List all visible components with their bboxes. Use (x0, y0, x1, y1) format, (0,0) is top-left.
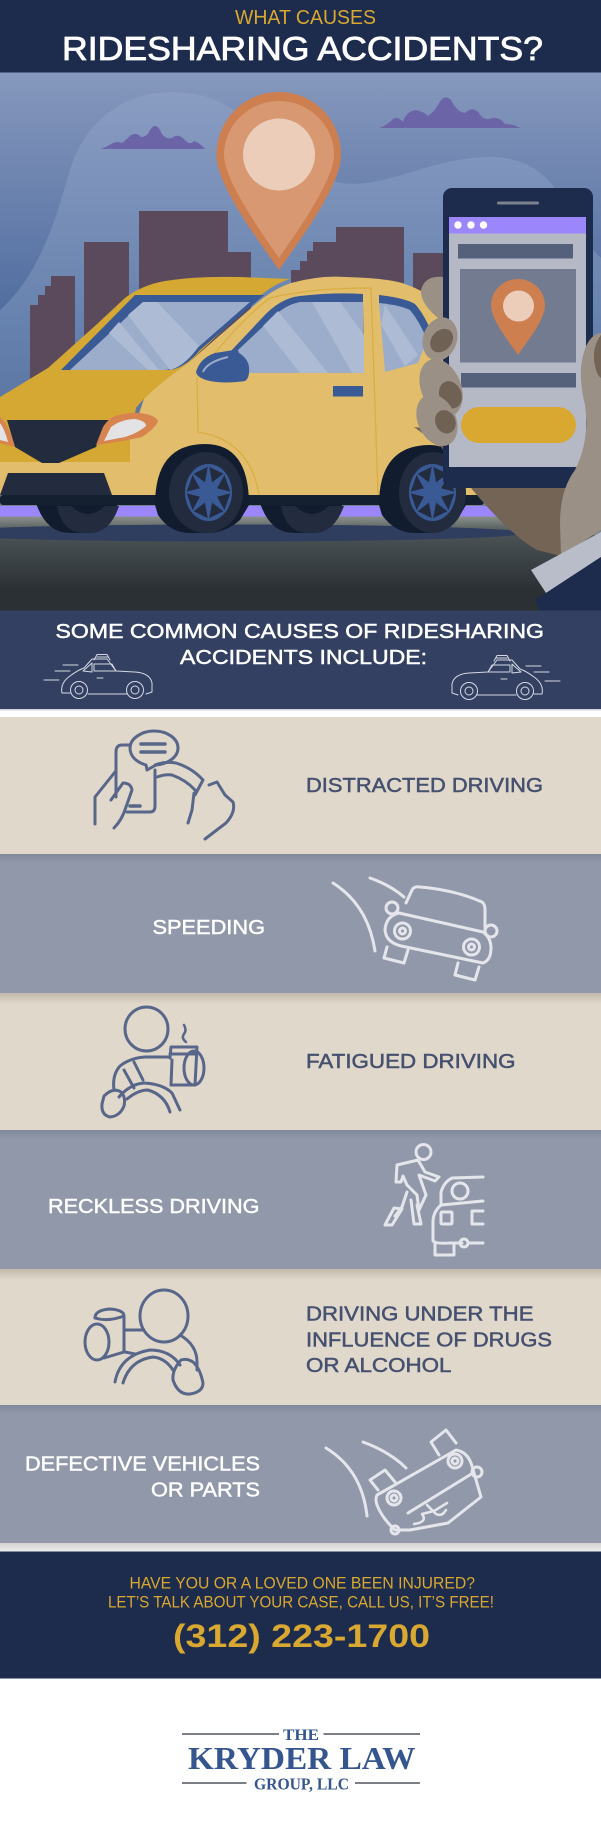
phone screen (449, 217, 586, 467)
label: driving under the influence: DRIVING UNDER THE (306, 1304, 534, 1326)
label: fatigued driving: FATIGUED DRIVING (306, 1051, 516, 1073)
title banner (0, 0, 601, 72)
far wheels (35, 500, 344, 533)
heading line 1: SOME COMMON CAUSES OF RIDESHARING (56, 620, 544, 643)
phone number: (312) 223-1700 (173, 1618, 430, 1654)
label: driving under the influence (306, 1304, 552, 1377)
front wheel (155, 444, 249, 533)
side window rear (379, 295, 435, 372)
label: defective vehicles (25, 1454, 260, 1502)
fingers and arm (408, 277, 601, 556)
cta line 1: HAVE YOU OR A LOVED ONE BEEN INJURED? (130, 1575, 475, 1593)
icon: overturned car (326, 1430, 482, 1534)
icon: driver with drink (85, 1290, 203, 1394)
logo (182, 1727, 420, 1794)
heading line 2: ACCIDENTS INCLUDE: (180, 646, 427, 669)
logo: the: THE (283, 1727, 319, 1744)
panel: reckless driving (0, 1130, 601, 1269)
call to action button (461, 407, 576, 443)
logo: kryder law: KRYDER LAW (188, 1740, 416, 1776)
label: driving under the influence: INFLUENCE OF DRUGS (306, 1330, 552, 1352)
panel: fatigued driving (0, 993, 601, 1130)
title: what causes: WHAT CAUSES (235, 6, 376, 29)
label: reckless driving: RECKLESS DRIVING (48, 1196, 260, 1218)
cloud right (379, 97, 520, 128)
windshield (61, 295, 264, 370)
location pin (216, 92, 341, 270)
icon: speeding car (333, 878, 497, 980)
icon: taxi right (452, 656, 560, 700)
cloud left (101, 126, 205, 149)
side window front (230, 293, 364, 373)
cta line 2: LET’S TALK ABOUT YOUR CASE, CALL US, IT’S FREE! (108, 1594, 494, 1612)
hero illustration (0, 72, 601, 610)
panel: speeding (0, 854, 601, 993)
headlight left (0, 417, 15, 447)
label: driving under the influence: OR ALCOHOL (306, 1355, 452, 1377)
side mirror (196, 350, 249, 382)
front grille (7, 420, 109, 463)
hand palm (414, 427, 601, 556)
icon: phone in hands with speech bubble (95, 731, 234, 839)
logo: group llc: GROUP, LLC (254, 1774, 349, 1794)
section heading band (0, 610, 601, 710)
door handle (333, 386, 363, 396)
sleeve (535, 557, 601, 610)
panel: defective vehicles (0, 1405, 601, 1543)
screen map image (460, 269, 576, 362)
label: defective vehicles: DEFECTIVE VEHICLES (25, 1454, 260, 1476)
call to action footer (0, 1552, 601, 1678)
road (0, 506, 601, 610)
icon: taxi left (44, 654, 152, 698)
car body side (0, 277, 490, 495)
city skyline (30, 211, 445, 400)
shirt cuff (531, 532, 601, 593)
rear wheel (379, 445, 466, 533)
yellow car (0, 277, 490, 533)
panel: distracted driving (0, 717, 601, 854)
icon: driver with coffee (102, 1007, 204, 1117)
underbody (0, 495, 484, 505)
smartphone (443, 188, 593, 488)
door seams (197, 288, 378, 495)
label: speeding: SPEEDING (152, 917, 265, 939)
icon: car and pedestrian (385, 1144, 483, 1255)
label: distracted driving: DISTRACTED DRIVING (306, 775, 543, 797)
mini pin (491, 279, 545, 355)
panel: driving under the influence (0, 1269, 601, 1405)
divider shadow (0, 1543, 601, 1552)
car hood dark (0, 277, 290, 462)
headlight right (96, 413, 158, 445)
title: ridesharing accidents: RIDESHARING ACCIDENTS? (62, 30, 543, 67)
front bumper grille (0, 473, 112, 495)
label: defective vehicles: OR PARTS (151, 1480, 260, 1502)
